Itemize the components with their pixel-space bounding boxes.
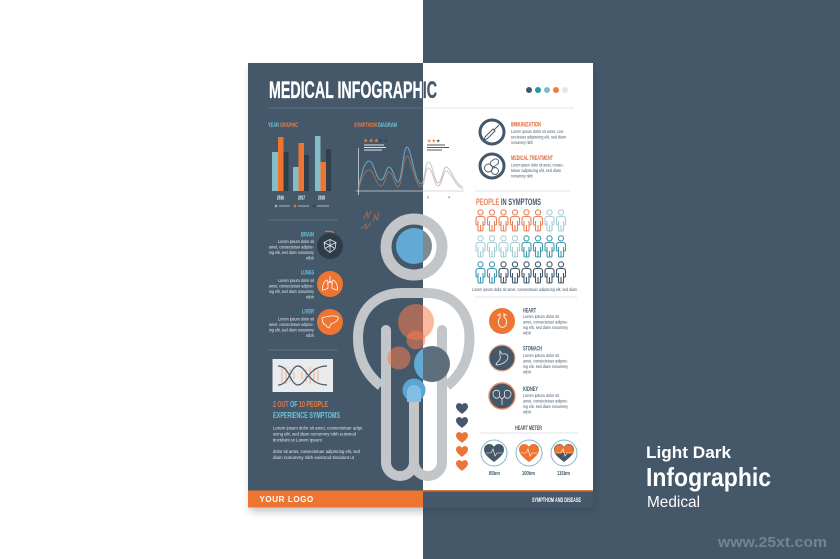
heading: kidney: KIDNEY xyxy=(523,387,538,393)
rating right xyxy=(427,138,449,150)
icon: kidney xyxy=(489,383,515,409)
rating right: ★★ xyxy=(427,138,436,144)
footer: caption bar: SYMPTHOM AND DISEASE xyxy=(532,498,581,504)
icon: pills xyxy=(480,154,504,178)
text block: tetuer adipiscing elit, sed diam xyxy=(511,168,561,173)
text block: amet, consectetuer adipisc- xyxy=(269,284,314,288)
palette dots xyxy=(526,87,568,93)
organ bubbles xyxy=(388,304,450,402)
pictogram row 1 xyxy=(476,210,566,231)
curves: right half xyxy=(423,162,464,190)
callout: 2 out of 10 people: 2 OUT OF 10 PEOPLE xyxy=(273,399,328,409)
footer: caption bar xyxy=(423,490,593,508)
background: white half xyxy=(0,0,423,559)
rating left xyxy=(363,138,389,150)
text block: Lorem ipsum dolor sit amet, consec- xyxy=(511,162,564,168)
panel: symptom diagram line chart xyxy=(354,122,464,200)
icon: syringe xyxy=(480,120,504,144)
text block xyxy=(523,393,569,414)
meter: 100: 100bm xyxy=(522,471,535,477)
text block: description: Lorem ipsum dolor sit amet, consectetuer adipi xyxy=(273,426,362,430)
text block: amet, consectetuer adipisc- xyxy=(523,358,568,364)
year labels: 2016 xyxy=(277,196,284,202)
rating left: ★★ xyxy=(378,138,389,144)
icon: lungs xyxy=(317,271,343,297)
axis ticks: 3 xyxy=(427,196,429,200)
heading: liver: LIVER xyxy=(302,308,314,316)
curves: left half xyxy=(358,146,423,188)
footer: logo bar: YOUR LOGO xyxy=(260,495,314,504)
axes xyxy=(356,148,464,195)
text block: nibh xyxy=(306,256,314,260)
hearts column xyxy=(456,403,468,471)
text block: ing elit, sed diam nonummy xyxy=(523,364,569,369)
head fill xyxy=(396,228,432,264)
heading: symptom diagram: SYMPTHOM DIAGRAM xyxy=(354,122,397,129)
callout: 2 out of 10 people: EXPERIENCE SYMPTOMS xyxy=(273,410,340,420)
icon: dna helix xyxy=(278,366,327,385)
text block: nibh xyxy=(306,333,314,338)
pictogram row 2 xyxy=(476,236,566,257)
text block: ing elit, sed diam nonummy xyxy=(269,250,315,255)
text block xyxy=(511,129,566,145)
text block: nonummy nibh xyxy=(511,140,533,145)
icon: brain xyxy=(317,231,343,259)
text block: nonummy nibh xyxy=(511,174,533,178)
text block: Lorem ipsum dolor sit xyxy=(523,353,560,358)
panel: kidney xyxy=(489,383,569,414)
text block: amet, consectetuer adipisc- xyxy=(269,244,314,250)
panel: brain xyxy=(269,231,343,260)
text block: description: scing elit, sed diam nonummy nibh euismod xyxy=(273,432,356,436)
text block: Lorem ipsum dolor sit xyxy=(523,393,560,398)
panel: heart xyxy=(489,308,569,336)
text block: nibh xyxy=(306,294,314,300)
caption: Lorem ipsum dolor sit amet, consectetuer adipiscing elit, sed diam xyxy=(472,287,577,292)
text block: Lorem ipsum dolor sit xyxy=(278,316,315,322)
panel: liver xyxy=(269,308,343,338)
poster card: dark half xyxy=(248,63,423,507)
heading: brain: BRAIN xyxy=(301,232,314,238)
icon: heart organ xyxy=(489,308,515,334)
axis ticks xyxy=(427,196,450,200)
poster card: white half xyxy=(423,63,593,507)
text block: nibh xyxy=(523,330,531,336)
heading: heart: HEART xyxy=(523,308,536,314)
side title: Medical xyxy=(647,494,700,511)
text block: ing elit, sed diam nonummy xyxy=(269,328,315,332)
text block: description: diam nonummy nibh euismod tincidunt ut xyxy=(273,455,355,460)
text block: Lorem ipsum dolor sit xyxy=(278,278,315,283)
year labels: 2017 xyxy=(298,196,305,202)
year labels xyxy=(277,196,325,202)
text block: amet, consectetuer adipisc- xyxy=(523,398,568,404)
text block: ing elit, sed diam nonummy xyxy=(269,289,315,294)
side title: Light Dark xyxy=(646,443,732,462)
bars xyxy=(272,136,331,191)
meter: 85: 85bm xyxy=(489,471,500,477)
text block: nibh xyxy=(523,410,531,414)
heading: medical treatment: MEDICAL TREATMENT xyxy=(511,156,553,162)
text block: ing elit, sed diam nonummy xyxy=(523,325,569,330)
callout: 2 out of 10 people xyxy=(273,399,340,420)
panel: medical treatment xyxy=(480,154,564,178)
footer: logo bar xyxy=(248,490,423,508)
meter: 115: 115bm xyxy=(557,471,570,477)
panel: people in symptoms xyxy=(472,197,577,292)
axis ticks: 4 xyxy=(448,196,450,200)
panel: heart meter xyxy=(480,425,578,477)
text block xyxy=(269,316,315,338)
text block: Lorem ipsum dolor sit xyxy=(523,314,560,319)
heading: people in symptoms: PEOPLE IN SYMPTOMS xyxy=(476,197,541,207)
text block: description: tincidunt ut Lorem ipsum xyxy=(273,438,322,442)
panel: lungs xyxy=(269,270,343,300)
text block xyxy=(523,353,569,374)
title: MEDICAL INFOGRAPHIC xyxy=(269,77,437,104)
text block xyxy=(269,278,315,300)
panel: immunization xyxy=(480,120,566,145)
legend xyxy=(275,205,329,207)
icon: liver xyxy=(317,309,343,335)
icon: stomach xyxy=(489,345,515,371)
panel: year graphic bar chart xyxy=(268,122,331,207)
heading: immunization: IMMUNIZATION xyxy=(511,122,541,128)
side title: Infographic xyxy=(646,462,771,492)
heading: heart meter: HEART METER xyxy=(515,425,542,432)
pictogram row 3 xyxy=(476,262,566,283)
text block: Lorem ipsum dolor sit amet, con- xyxy=(511,129,564,134)
heading: stomach: STOMACH xyxy=(523,346,542,352)
side title xyxy=(646,443,771,511)
text block xyxy=(269,239,315,260)
text block: description: dolor sit amet, consectetuer adipiscing elit, sed xyxy=(273,449,360,454)
text block: ing elit, sed diam nonummy xyxy=(523,404,569,409)
watermark: www.25xt.com xyxy=(717,534,827,551)
text block: nibh xyxy=(523,370,531,374)
text block: amet, consectetuer adipisc- xyxy=(523,320,568,324)
rating left: ★★★ xyxy=(363,138,379,144)
text block: Lorem ipsum dolor sit xyxy=(278,239,315,244)
heading: lungs: LUNGS xyxy=(301,270,314,276)
panel: dna picture xyxy=(272,359,333,392)
heading: year graphic: YEAR GRAPHIC xyxy=(268,122,298,129)
card shadow xyxy=(250,68,595,512)
background: dark half xyxy=(423,0,840,559)
text block: amet, consectetuer adipisc- xyxy=(269,322,314,327)
person figure outline xyxy=(358,219,470,476)
panel: stomach xyxy=(489,345,569,374)
rating right: ★ xyxy=(436,138,441,144)
year labels: 2018 xyxy=(318,196,325,202)
text block: sectetuer adipiscing elit, sed diam xyxy=(511,134,566,140)
text block xyxy=(523,314,569,336)
lightning marks xyxy=(361,211,379,229)
text block: description xyxy=(273,426,362,460)
text block xyxy=(511,162,564,178)
